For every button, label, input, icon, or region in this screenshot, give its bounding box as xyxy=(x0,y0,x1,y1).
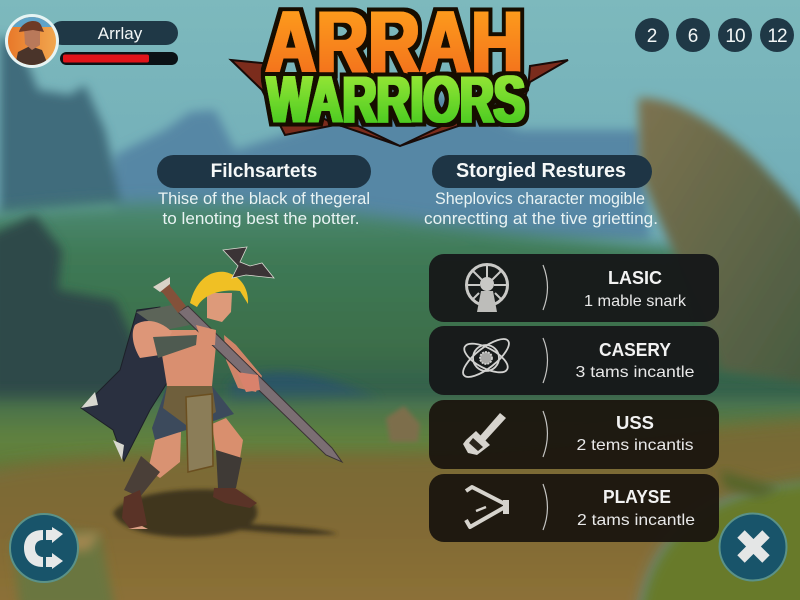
kilt xyxy=(152,386,234,440)
card: LASIC: LASIC xyxy=(608,268,662,288)
title line two: WARRIORS xyxy=(267,62,525,136)
heading pill xyxy=(432,155,652,188)
card: PLAYSE: 2 tams incantle xyxy=(577,512,695,529)
counter 2: 2 xyxy=(647,26,657,47)
counter 6: 6 xyxy=(688,26,698,47)
description text: conrectting at the tive grietting. xyxy=(424,209,658,228)
counter 12: 12 xyxy=(767,26,787,47)
card: CASERY xyxy=(429,326,719,395)
description text: to lenoting best the potter. xyxy=(162,209,360,228)
axe head decoration xyxy=(223,247,274,278)
arm wrap xyxy=(153,335,197,358)
avatar xyxy=(5,14,59,70)
counter 10 xyxy=(718,18,752,52)
description text: Sheplovics character mogible xyxy=(435,189,645,208)
card: USS: 2 tems incantis xyxy=(576,437,694,454)
heading pill xyxy=(157,155,371,188)
icon: bracket tool xyxy=(466,487,506,527)
round counters xyxy=(635,18,794,52)
description text xyxy=(158,189,370,228)
hands xyxy=(196,325,216,345)
card: PLAYSE xyxy=(429,474,719,542)
counter 12 xyxy=(760,18,794,52)
counter 6 xyxy=(676,18,710,52)
panel: right description xyxy=(424,155,658,228)
cliff: right xyxy=(638,98,800,385)
card: USS xyxy=(429,400,719,469)
counter 2 xyxy=(635,18,669,52)
description text: Thise of the black of thegeral xyxy=(158,189,370,208)
legs xyxy=(148,432,181,478)
character: warrior xyxy=(81,247,342,537)
button: swap xyxy=(10,514,78,582)
feet xyxy=(122,490,147,529)
cape xyxy=(81,307,172,461)
list of class cards xyxy=(429,254,719,542)
logo backing star xyxy=(231,60,568,146)
icon: orbit xyxy=(458,333,514,383)
sword xyxy=(178,306,342,462)
cliff: left xyxy=(0,215,138,420)
card: PLAYSE: PLAYSE xyxy=(603,487,671,507)
torso xyxy=(162,330,216,386)
head and hair xyxy=(207,293,232,322)
ground shadow xyxy=(113,489,338,537)
name plate xyxy=(50,21,178,45)
description text xyxy=(424,189,658,228)
card: LASIC: 1 mable snark xyxy=(584,293,687,310)
health bar xyxy=(60,52,178,65)
name plate: Arrlay xyxy=(98,24,143,43)
panel: left description xyxy=(157,155,371,228)
counter 10: 10 xyxy=(725,26,745,47)
icon: swap arrows xyxy=(24,527,63,569)
card: CASERY: 3 tams incantle xyxy=(576,364,695,381)
card: USS: USS xyxy=(616,413,654,433)
button: close xyxy=(720,514,786,580)
heading pill: Filchsartets xyxy=(211,161,317,182)
icon: key tool xyxy=(463,413,506,455)
card: LASIC xyxy=(429,254,719,322)
icon: cross xyxy=(741,534,766,559)
card: CASERY: CASERY xyxy=(599,340,671,360)
icon: wheel xyxy=(466,264,508,312)
heading pill: Storgied Restures xyxy=(456,160,626,182)
player status xyxy=(5,14,178,70)
title logo xyxy=(231,0,568,146)
